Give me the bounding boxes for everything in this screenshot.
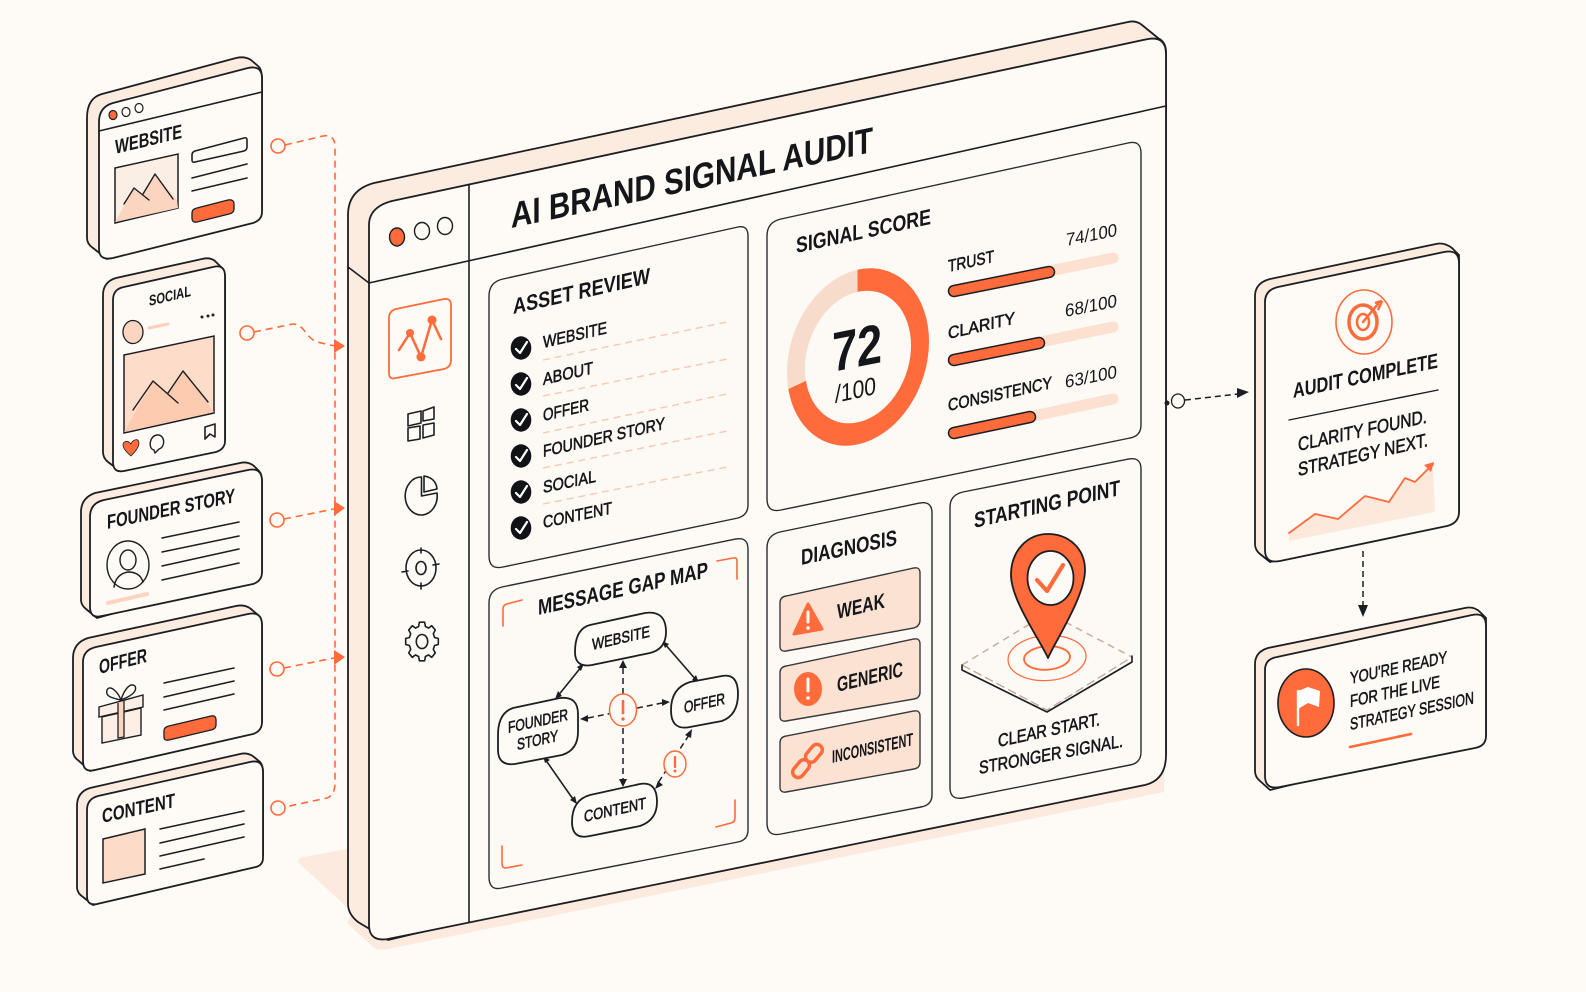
ground shadow <box>298 770 1164 950</box>
sidebar icon: target <box>402 548 439 589</box>
bar: trust: 74/100 <box>1066 220 1117 250</box>
gap alert marker <box>610 694 636 726</box>
card: live strategy session: YOU'RE READY <box>1350 647 1447 688</box>
card: website <box>87 57 262 259</box>
corner brackets <box>502 558 737 868</box>
panel: message gap map: MESSAGE GAP MAP <box>538 557 708 620</box>
sidebar icon: settings gear <box>406 622 438 661</box>
icon: flag <box>1278 669 1334 737</box>
row: inconsistent <box>780 711 920 792</box>
bar: clarity: CLARITY <box>948 308 1015 343</box>
checklist: SOCIAL <box>543 466 596 497</box>
panel: message gap map <box>489 539 748 889</box>
bar: clarity <box>948 291 1117 360</box>
node: content <box>572 784 657 837</box>
card: content: CONTENT <box>102 790 175 828</box>
card: website: WEBSITE <box>115 121 182 159</box>
bar: consistency <box>948 362 1117 433</box>
node: content: CONTENT <box>584 795 646 826</box>
card: social <box>103 258 225 471</box>
checklist: FOUNDER STORY <box>543 413 665 461</box>
row: generic: GENERIC <box>837 657 903 697</box>
bar: trust: TRUST <box>948 246 994 276</box>
card: live strategy session: STRATEGY SESSION <box>1350 688 1474 734</box>
panel: asset review <box>489 227 748 568</box>
card: content <box>77 753 263 905</box>
map links <box>543 641 699 804</box>
gap alert marker <box>664 751 686 777</box>
sidebar icon: active analytics <box>389 299 451 378</box>
node: offer <box>671 676 738 728</box>
sidebar icon: grid <box>408 407 434 441</box>
card: live strategy session: FOR THE LIVE <box>1350 671 1440 711</box>
card: audit complete: AUDIT COMPLETE <box>1293 350 1438 403</box>
sidebar icon: pie chart <box>405 476 437 515</box>
card: offer <box>73 605 262 771</box>
window controls <box>390 218 452 246</box>
panel: asset review: ASSET REVIEW <box>513 263 650 319</box>
connector: audit complete to next step <box>1358 551 1368 617</box>
checklist: CONTENT <box>543 498 612 532</box>
panel: diagnosis <box>767 503 932 835</box>
panel: starting point <box>950 459 1141 798</box>
checklist: WEBSITE <box>543 317 607 352</box>
node: founder story: STORY <box>517 727 558 754</box>
score donut <box>796 267 920 447</box>
connector: assets to dashboard <box>240 136 345 815</box>
title: AI BRAND SIGNAL AUDIT <box>511 119 873 236</box>
checklist <box>511 317 665 540</box>
main dashboard window <box>348 21 1166 940</box>
node: website: WEBSITE <box>592 623 650 654</box>
bar: consistency: 63/100 <box>1065 362 1117 392</box>
map tile <box>962 613 1132 712</box>
panel: starting point: CLEAR START. <box>998 709 1100 751</box>
card: audit complete <box>1255 244 1459 562</box>
bar: clarity: 68/100 <box>1065 291 1117 321</box>
checklist: OFFER <box>543 395 589 425</box>
node: website <box>575 613 666 665</box>
node: offer: OFFER <box>684 690 725 717</box>
panel: signal score: /100 <box>835 372 876 409</box>
card: live strategy session <box>1255 608 1486 790</box>
connector: dashboard to audit complete <box>1164 388 1249 408</box>
panel: signal score: 72 <box>832 312 882 384</box>
growth chart <box>1289 462 1435 541</box>
card: audit complete: STRATEGY NEXT. <box>1298 430 1428 481</box>
panel: starting point: STARTING POINT <box>974 475 1120 533</box>
location pin <box>1011 534 1085 658</box>
card: offer: OFFER <box>99 645 147 679</box>
card: social: SOCIAL <box>149 283 191 310</box>
panel: signal score <box>767 142 1141 511</box>
node: founder story: FOUNDER <box>508 706 568 737</box>
bar: trust <box>948 220 1117 291</box>
panel: starting point: STRONGER SIGNAL. <box>979 731 1123 778</box>
bar: consistency: CONSISTENCY <box>948 372 1052 415</box>
card: founder story <box>81 462 262 618</box>
card: founder story: FOUNDER STORY <box>107 485 235 534</box>
row: generic <box>780 639 920 721</box>
panel: signal score: SIGNAL SCORE <box>796 204 931 258</box>
checklist: ABOUT <box>543 358 593 389</box>
row: weak <box>780 568 920 651</box>
node: founder story <box>498 698 578 764</box>
row: weak: WEAK <box>837 589 885 624</box>
row: inconsistent: INCONSISTENT <box>832 729 913 767</box>
panel: diagnosis: DIAGNOSIS <box>801 525 897 570</box>
card: audit complete: CLARITY FOUND. <box>1298 407 1427 456</box>
icon: target <box>1336 290 1392 354</box>
